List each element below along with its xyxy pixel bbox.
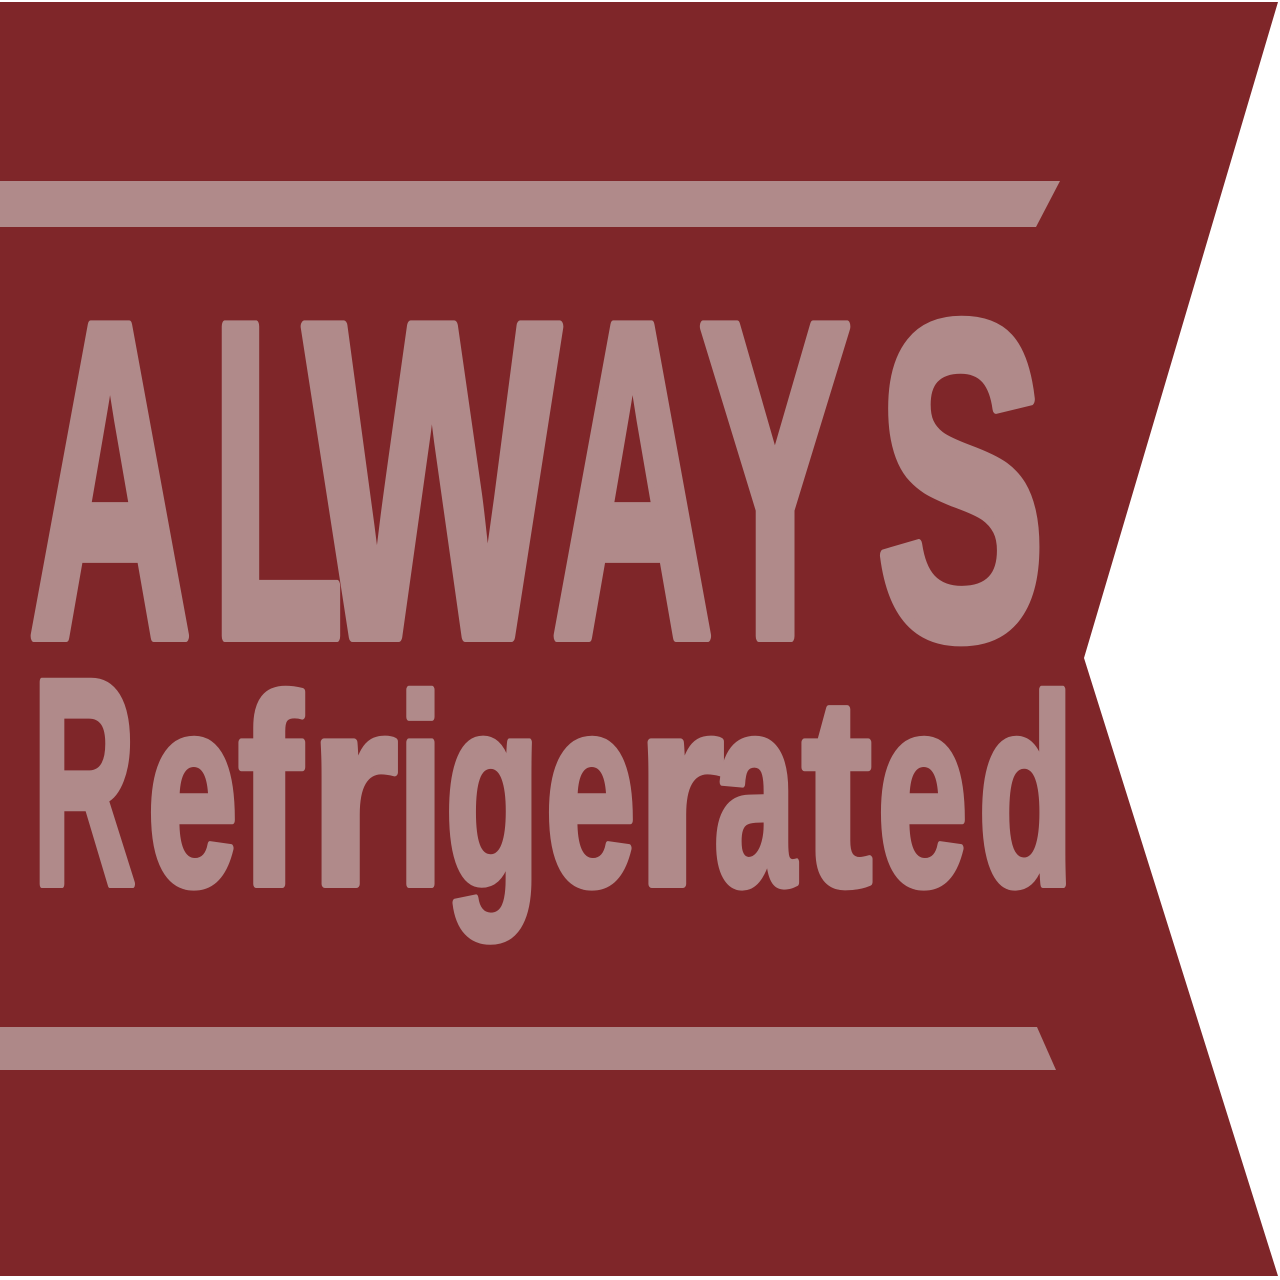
subheading: Refrigerated: e (545, 641, 636, 941)
subheading: Refrigerated: e (147, 641, 238, 941)
heading: ALWAYS: S (876, 230, 1046, 732)
subheading: Refrigerated: i (397, 641, 444, 941)
top stripe (0, 181, 1060, 227)
heading: ALWAYS: Y (699, 230, 851, 732)
subheading: Refrigerated: g (445, 641, 540, 943)
heading: ALWAYS: A (28, 230, 192, 732)
subheading: Refrigerated: r (636, 641, 724, 941)
subheading: Refrigerated: f (238, 641, 304, 941)
heading: ALWAYS: A (551, 230, 714, 732)
heading: ALWAYS: L (210, 230, 344, 732)
subheading: Refrigerated: r (309, 641, 398, 941)
heading: ALWAYS: W (304, 230, 563, 732)
subheading: Refrigerated: a (714, 641, 797, 941)
subheading: Refrigerated: d (978, 641, 1074, 941)
subheading: Refrigerated: e (877, 641, 968, 941)
subheading: Refrigerated: R (32, 619, 136, 947)
subheading: Refrigerated: t (802, 641, 872, 941)
bottom stripe (0, 1027, 1056, 1070)
